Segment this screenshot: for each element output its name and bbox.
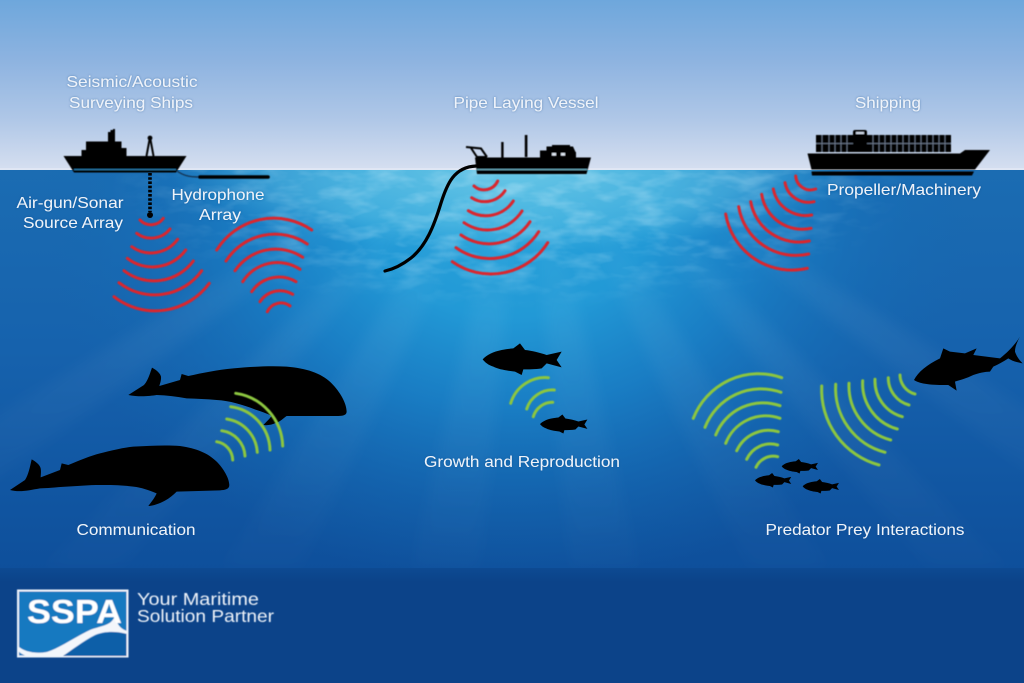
green sound waves: predator bbox=[822, 375, 915, 465]
label: seismic ships: Seismic/Acoustic bbox=[66, 74, 198, 91]
icon: prey fish 2 bbox=[755, 473, 791, 488]
logo tagline: line 1: Your Maritime bbox=[137, 589, 259, 609]
label: shipping: Shipping bbox=[855, 95, 921, 112]
sky background bbox=[0, 0, 1024, 170]
label: predator prey interactions: Predator Prey Interactions bbox=[766, 522, 964, 539]
label: growth and reproduction: Growth and Reproduction bbox=[424, 454, 620, 471]
label: air-gun source: Air-gun/Sonar bbox=[16, 195, 124, 212]
label: hydrophone: Hydrophone bbox=[172, 187, 265, 204]
ocean background bbox=[0, 170, 1024, 570]
icon: pipe laying vessel bbox=[466, 135, 591, 174]
label: source array: Source Array bbox=[23, 215, 123, 232]
icon: seismic survey ship bbox=[64, 129, 186, 172]
icon: predator tuna bbox=[914, 337, 1023, 391]
red sound waves: pipe laying bbox=[452, 181, 548, 274]
label: pipe laying vessel: Pipe Laying Vessel bbox=[454, 95, 598, 112]
logo tagline: line 2: Solution Partner bbox=[137, 606, 274, 626]
red sound waves: air-gun source bbox=[114, 218, 209, 311]
logo: SSPA bbox=[18, 590, 128, 656]
icon: larger fish bbox=[483, 343, 562, 375]
logo: SSPA: SSPA bbox=[27, 593, 122, 630]
icon: prey fish 3 bbox=[803, 479, 839, 494]
icon: air-gun source cable bbox=[147, 173, 153, 218]
label: communication: Communication bbox=[76, 522, 196, 539]
icon: upper whale bbox=[128, 366, 347, 425]
green sound waves: prey school bbox=[693, 374, 782, 467]
icon: container ship bbox=[808, 130, 990, 176]
green sound waves: fish bbox=[511, 378, 554, 417]
red sound waves: hydrophone array bbox=[217, 218, 312, 312]
icon: smaller fish bbox=[540, 414, 587, 434]
horizon line bbox=[0, 168, 1024, 170]
label: propeller machinery: Propeller/Machinery bbox=[827, 182, 981, 199]
icon: prey fish 1 bbox=[782, 459, 818, 474]
icon: hydrophone streamer bbox=[177, 171, 268, 177]
red sound waves: propeller bbox=[726, 176, 816, 270]
green sound waves: whale communication bbox=[217, 393, 283, 460]
footer band bbox=[0, 568, 1024, 683]
label: surveying ships: Surveying Ships bbox=[69, 95, 193, 112]
icon: lower whale bbox=[10, 445, 229, 506]
label: hydrophone array: Array bbox=[199, 207, 241, 224]
icon: subsea pipe bbox=[385, 166, 476, 271]
